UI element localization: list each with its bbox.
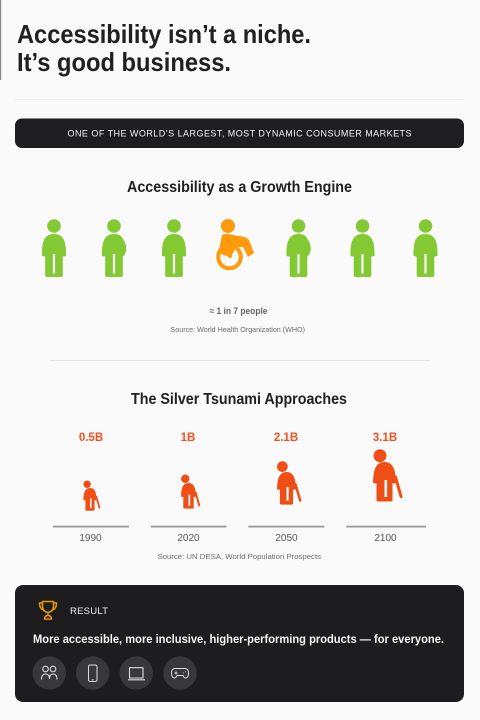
column: 2100	[346, 432, 426, 544]
panel: result	[15, 585, 464, 702]
icon: person 7	[413, 219, 438, 277]
column: 1990: 1990	[79, 533, 102, 544]
column: 2020: 2020	[177, 533, 200, 544]
column: 1990	[53, 432, 129, 544]
column: 2050: 2.1B	[274, 432, 298, 444]
icon: person 1	[42, 219, 66, 277]
icon: people	[33, 656, 66, 690]
source: UN DESA: Source: UN DESA, World Population Prospects	[158, 552, 321, 561]
heading: silver tsunami: The Silver Tsunami Approaches	[131, 391, 347, 408]
source: WHO: Source: World Health Organization (WHO)	[170, 325, 305, 334]
title	[17, 19, 311, 77]
column: 2050: 2050	[275, 533, 298, 544]
pictogram: 1 in 7 people	[42, 219, 438, 277]
column: 2020: 1B	[181, 432, 195, 444]
icon: trophy	[40, 602, 56, 619]
heading: growth engine: Accessibility as a Growth Engine	[127, 179, 352, 196]
icon: phone	[76, 656, 109, 690]
column: 2100: 3.1B	[373, 432, 397, 444]
label: result: RESULT	[70, 606, 108, 617]
icon: game controller	[163, 656, 197, 690]
icon: person 3	[162, 219, 186, 277]
icon: laptop	[120, 656, 153, 690]
result statement: More accessible, more inclusive, higher-performing products — for everyone.	[33, 632, 444, 646]
title: Accessibility isn’t a niche.	[17, 19, 311, 49]
title: It’s good business.	[17, 47, 231, 77]
column: 2020	[151, 432, 226, 544]
stat: 1 in 7: ≈ 1 in 7 people	[210, 306, 268, 316]
column: 2100: 2100	[374, 533, 397, 544]
icon: person 5	[286, 219, 311, 277]
column: 1990: 0.5B	[79, 432, 103, 444]
icon: person in wheelchair	[218, 219, 254, 268]
column: 2050	[248, 432, 324, 544]
banner: ONE OF THE WORLD’S LARGEST, MOST DYNAMIC CONSUMER MARKETS	[68, 128, 412, 138]
icon: person 6	[350, 219, 375, 277]
icon: person 2	[102, 219, 126, 277]
banner	[15, 118, 464, 148]
chart: ageing population	[53, 432, 426, 544]
